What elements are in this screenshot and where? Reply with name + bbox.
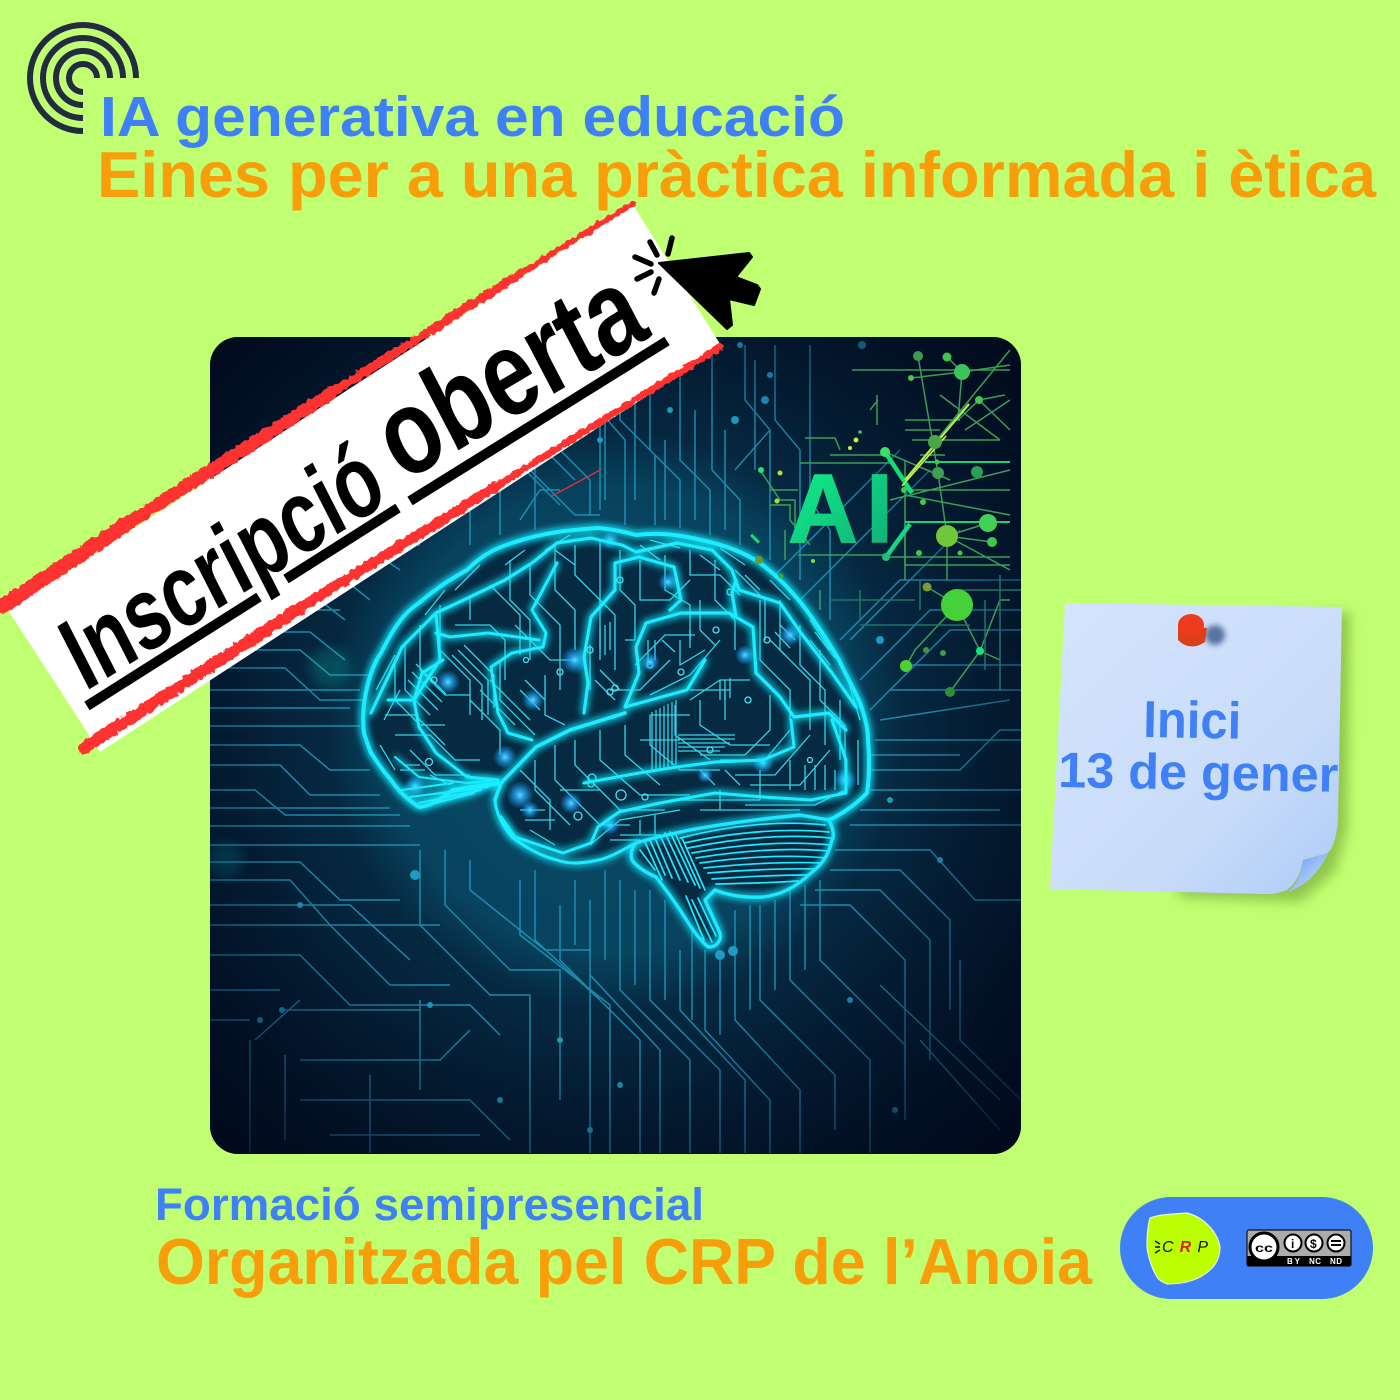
note shadow	[1100, 612, 1350, 902]
badge: CC BY-NC-ND: i	[1291, 1237, 1294, 1251]
sticky note: start date	[1050, 603, 1350, 902]
cerebellum and brain stem	[631, 815, 833, 947]
note curl	[1288, 853, 1328, 892]
logo: CRP: C R P	[1162, 1239, 1208, 1256]
note text: Inici	[1143, 691, 1242, 751]
brain fill	[363, 528, 869, 947]
badge: CC BY-NC-ND: cc	[1255, 1241, 1273, 1255]
brain contours	[363, 528, 869, 863]
badge: CC BY-NC-ND: $	[1310, 1237, 1317, 1251]
brain circuitry	[376, 535, 860, 845]
red streak	[552, 469, 602, 496]
sticky note: start date: 13 de gener	[1058, 742, 1339, 803]
logo: CRP	[1147, 1213, 1220, 1284]
banner underline	[87, 341, 667, 706]
note paper	[1050, 603, 1342, 894]
circuit traces background	[210, 337, 1021, 1153]
brain light spots	[404, 531, 857, 835]
banner text: oberta	[353, 239, 665, 506]
brain	[363, 528, 869, 947]
badge: CC BY-NC-ND: ND	[1330, 1257, 1342, 1266]
logo: concentric arcs	[30, 25, 136, 131]
subtitle: Eines per a una pràctica informada i ètica: Eines per a una pràctica informada i ètica	[97, 138, 1377, 211]
brain nodes	[426, 577, 812, 820]
banner paper	[8, 205, 722, 752]
icon: red pin	[1178, 614, 1225, 647]
banner: Inscripció oberta	[3, 204, 722, 752]
badge: CC BY-NC-ND: BY	[1287, 1257, 1301, 1266]
text: Organitzada pel CRP de l'Anoia: Organitzada pel CRP de l’Anoia	[156, 1225, 1093, 1298]
banner text	[43, 239, 665, 712]
banner text: Inscripció	[43, 418, 400, 712]
AI network	[750, 350, 1021, 697]
icon: mouse cursor with click sparks	[635, 238, 760, 329]
title: IA generativa en educació: IA generativa en educació	[100, 85, 845, 149]
badge: CC BY-NC-ND: NC	[1309, 1257, 1321, 1266]
pill: logos	[1120, 1197, 1373, 1299]
badge: CC BY-NC-ND	[1247, 1230, 1351, 1266]
text: Formació semipresencial: Formació semipresencial	[155, 1179, 704, 1230]
panel: brain illustration	[207, 337, 1021, 1154]
AI label: AI	[788, 454, 893, 563]
banner red edges	[3, 204, 720, 748]
